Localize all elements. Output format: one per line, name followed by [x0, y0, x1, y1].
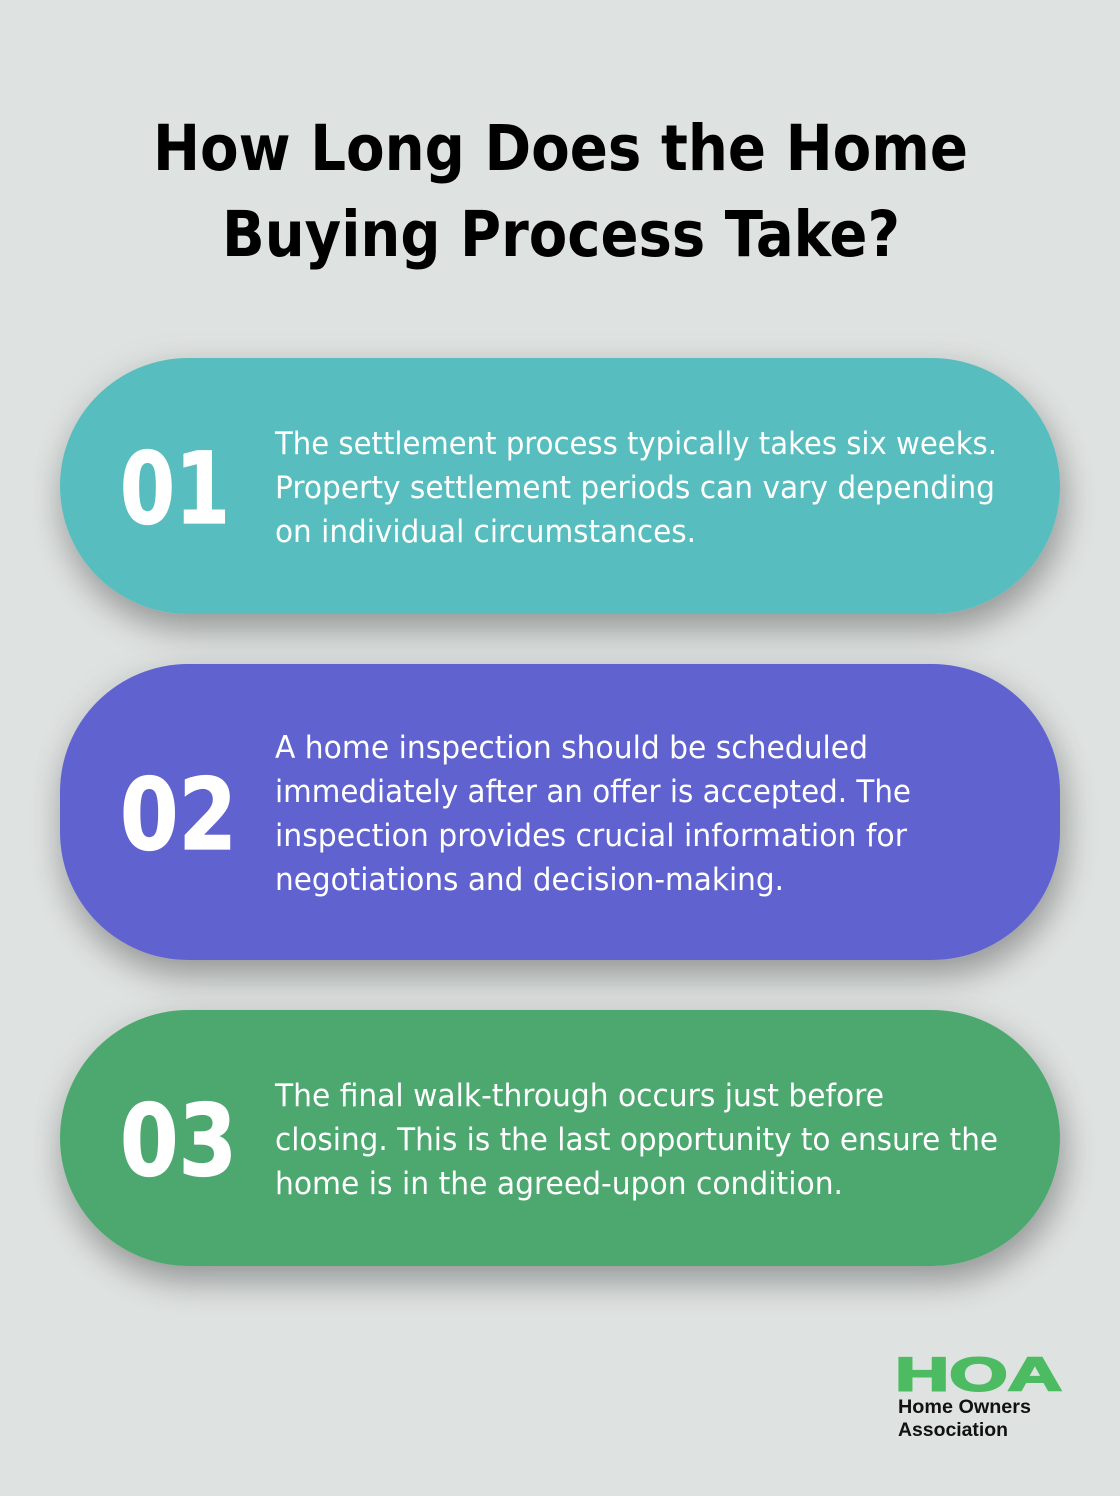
logo: HOA: Association: [898, 1420, 1008, 1441]
step 02 text: inspection provides crucial information for: [275, 818, 907, 854]
step 01 text: Property settlement periods can vary depending: [275, 470, 995, 506]
step 02 text: immediately after an offer is accepted. The: [275, 774, 911, 810]
step 02 text: A home inspection should be scheduled: [275, 730, 868, 766]
title: [153, 112, 968, 271]
step 01 text: The settlement process typically takes six weeks.: [274, 426, 997, 462]
step 03 text: home is in the agreed-upon condition.: [275, 1166, 843, 1202]
logo: HOA: [895, 1348, 1062, 1441]
purple pill: [60, 664, 1060, 960]
step 03 text: closing. This is the last opportunity to ensure the: [275, 1122, 998, 1158]
number 01: 01: [120, 432, 230, 547]
logo: HOA: Home Owners: [898, 1397, 1031, 1418]
step 01 text: on individual circumstances.: [275, 514, 696, 550]
title: How Long Does the Home: [153, 112, 968, 185]
step 02 text: [275, 730, 911, 898]
panel: step 03: [60, 1010, 1060, 1266]
teal pill: [60, 358, 1060, 614]
panel: step 02: [60, 664, 1060, 960]
title: Buying Process Take?: [222, 198, 900, 271]
step 02 text: negotiations and decision-making.: [275, 862, 784, 898]
step 03 text: The final walk-through occurs just before: [274, 1078, 884, 1114]
green pill: [60, 1010, 1060, 1266]
step 01 text: [274, 426, 997, 550]
panel: step 01: [60, 358, 1060, 614]
logo: HOA: HOA: [895, 1348, 1062, 1400]
step 03 text: [274, 1078, 998, 1202]
number 02: 02: [120, 758, 237, 873]
number 03: 03: [120, 1084, 237, 1199]
